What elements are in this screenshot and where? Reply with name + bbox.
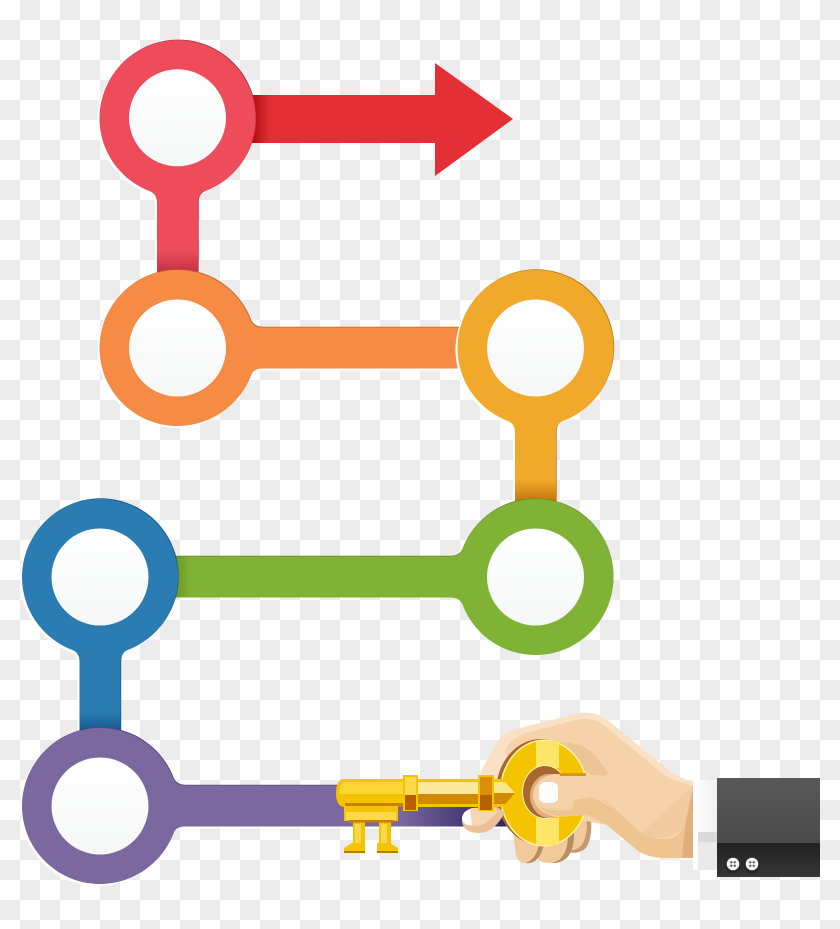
node 3: yellow ring with stem bbox=[456, 269, 614, 504]
purple bar dark end bbox=[400, 786, 510, 826]
hand: palm bbox=[480, 713, 693, 858]
hand: thumb with nail bbox=[533, 773, 612, 817]
node 4: green ring with bar bbox=[174, 498, 613, 655]
key: teeth bbox=[344, 806, 398, 853]
key: shaft and collars bbox=[336, 775, 517, 811]
hand: left fingertip bbox=[462, 807, 505, 833]
node 5: blue ring with stem bbox=[20, 498, 179, 733]
node 6: purple ring with bar bbox=[20, 727, 511, 886]
shirt cuff bbox=[693, 780, 717, 870]
jacket sleeve with buttons bbox=[717, 778, 820, 877]
red arrow bbox=[250, 63, 513, 176]
key: ring bow bbox=[496, 739, 588, 846]
hand: lower fingers bbox=[512, 812, 591, 863]
node 2: orange ring with bar bbox=[98, 269, 468, 428]
node 1: red ring with stem bbox=[98, 40, 256, 274]
